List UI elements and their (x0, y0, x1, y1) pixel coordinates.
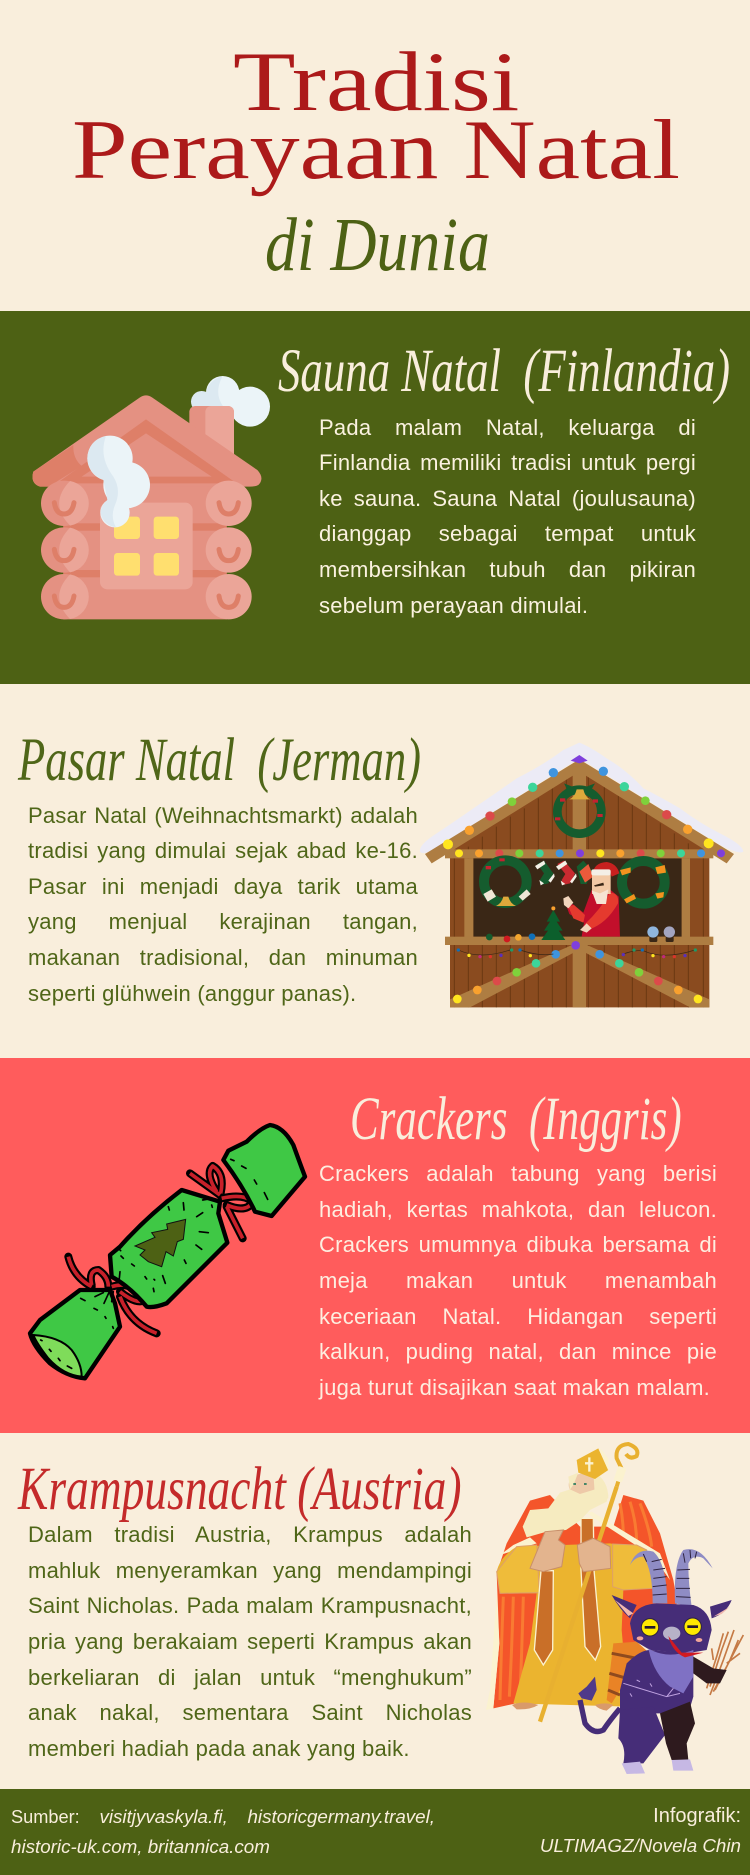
text block: Sauna Natal description: dianggap sebagai tempat untuk (319, 521, 696, 546)
text block: Crackers description: kalkun, puding natal, dan mince pie (319, 1339, 717, 1364)
text block: Sauna Natal description (319, 415, 696, 618)
text block: Sauna Natal description: ke sauna. Sauna Natal (joulusauna) (319, 486, 696, 511)
chimney smoke (191, 376, 270, 427)
text block: Crackers description: Crackers adalah tabung yang berisi (319, 1161, 717, 1186)
Saint Nicholas (486, 1444, 677, 1722)
text block: Krampusnacht description: berkeliaran di jalan untuk “menghukum” (28, 1665, 472, 1690)
title: Tradisi (233, 35, 519, 129)
Krampus body (578, 1595, 732, 1774)
ribbon ties (68, 1166, 253, 1333)
text block: Krampusnacht description: Saint Nicholas. Pada malam Krampusnacht, (28, 1593, 472, 1618)
text block: Crackers description: meja makan untuk menambah (319, 1268, 717, 1293)
hanging stockings (535, 861, 593, 885)
text block: Crackers description: hadiah, kertas mahkota, dan lelucon. (319, 1197, 717, 1222)
text block: Crackers description: keceriaan Natal. Hidangan seperti (319, 1304, 717, 1329)
band: England red panel (0, 1058, 750, 1433)
small fairy lights under counter (457, 948, 697, 958)
tree motif (135, 1219, 186, 1267)
text block: Krampusnacht description (28, 1522, 472, 1761)
footer: sources: Sumber: visitjyvaskyla.fi, historicgermany.travel, (11, 1806, 435, 1827)
roof string lights (443, 755, 725, 1003)
footer: sources: historic-uk.com, britannica.com (11, 1836, 270, 1857)
text block: Pasar Natal description: Pasar ini menjadi daya tarik utama (28, 874, 418, 899)
text block: Pasar Natal description: seperti glühwein (anggur panas). (28, 981, 356, 1006)
text block: Pasar Natal description: Pasar Natal (Weihnachtsmarkt) adalah (28, 803, 418, 828)
wooden basket (607, 1642, 653, 1703)
text block: Sauna Natal description: sebelum perayaan dimulai. (319, 593, 588, 618)
text block: Pasar Natal description: makanan tradisional, dan minuman (28, 945, 418, 970)
birch twigs and arm (693, 1630, 743, 1695)
footer: sources (11, 1806, 435, 1857)
text block: Krampusnacht description: memberi hadiah pada anak yang baik. (28, 1736, 410, 1761)
title (72, 35, 680, 197)
text block: Sauna Natal description: membersihkan tubuh dan pikiran (319, 557, 696, 582)
text block: Crackers description: Crackers umumnya dibuka bersama di (319, 1232, 717, 1257)
text block: Pasar Natal description (28, 803, 418, 1006)
text block: Pasar Natal description: yang menjual kerajinan tangan, (28, 909, 418, 934)
panel heading: Crackers: Crackers (Inggris) (350, 1084, 682, 1153)
vendor in Santa hat (563, 862, 620, 937)
text block: Krampusnacht description: mahluk menyeramkan yang mendampingi (28, 1558, 472, 1583)
white steam cloud (87, 436, 150, 527)
band: Finland green panel (0, 311, 750, 684)
Krampus horns (630, 1549, 713, 1607)
footer: credit: Infografik: (653, 1805, 741, 1827)
text block: Krampusnacht description: Dalam tradisi Austria, Krampus adalah (28, 1522, 472, 1547)
footer: credit: ULTIMAGZ/Novela Chin (540, 1835, 741, 1856)
footer: credit (540, 1805, 741, 1856)
icon: green Christmas cracker (28, 1122, 308, 1380)
text block: Krampusnacht description: anak nakal, sementara Saint Nicholas (28, 1700, 472, 1725)
band: footer green panel (0, 1789, 750, 1875)
panel heading: Krampusnacht: Krampusnacht (Austria) (17, 1454, 461, 1523)
text block: Sauna Natal description: Pada malam Natal, keluarga di (319, 415, 696, 440)
illustration: Saint Nicholas and Krampus (486, 1442, 744, 1774)
icon: log cabin sauna with steam (32, 376, 270, 620)
text block: Crackers description: juga turut disajikan saat makan malam. (319, 1375, 710, 1400)
text block: Crackers description (318, 1161, 717, 1400)
panel heading: Pasar Natal: Pasar Natal (Jerman) (17, 725, 421, 794)
cracker body (30, 1125, 305, 1378)
icon: Christmas market stall (420, 742, 744, 1008)
text block: Pasar Natal description: tradisi yang dimulai sejak abad ke-16. (28, 838, 418, 863)
small tree, ornaments and snow globes (486, 906, 675, 942)
title: Perayaan Natal (72, 103, 680, 197)
wreaths and bells (483, 783, 666, 906)
text block: Sauna Natal description: Finlandia memiliki tradisi untuk pergi (319, 450, 696, 475)
subtitle: di Dunia (265, 203, 490, 287)
text block: Krampusnacht description: pria yang berakaiam seperti Krampus akan (28, 1629, 472, 1654)
panel heading: Sauna Natal: Sauna Natal (Finlandia) (278, 336, 730, 405)
